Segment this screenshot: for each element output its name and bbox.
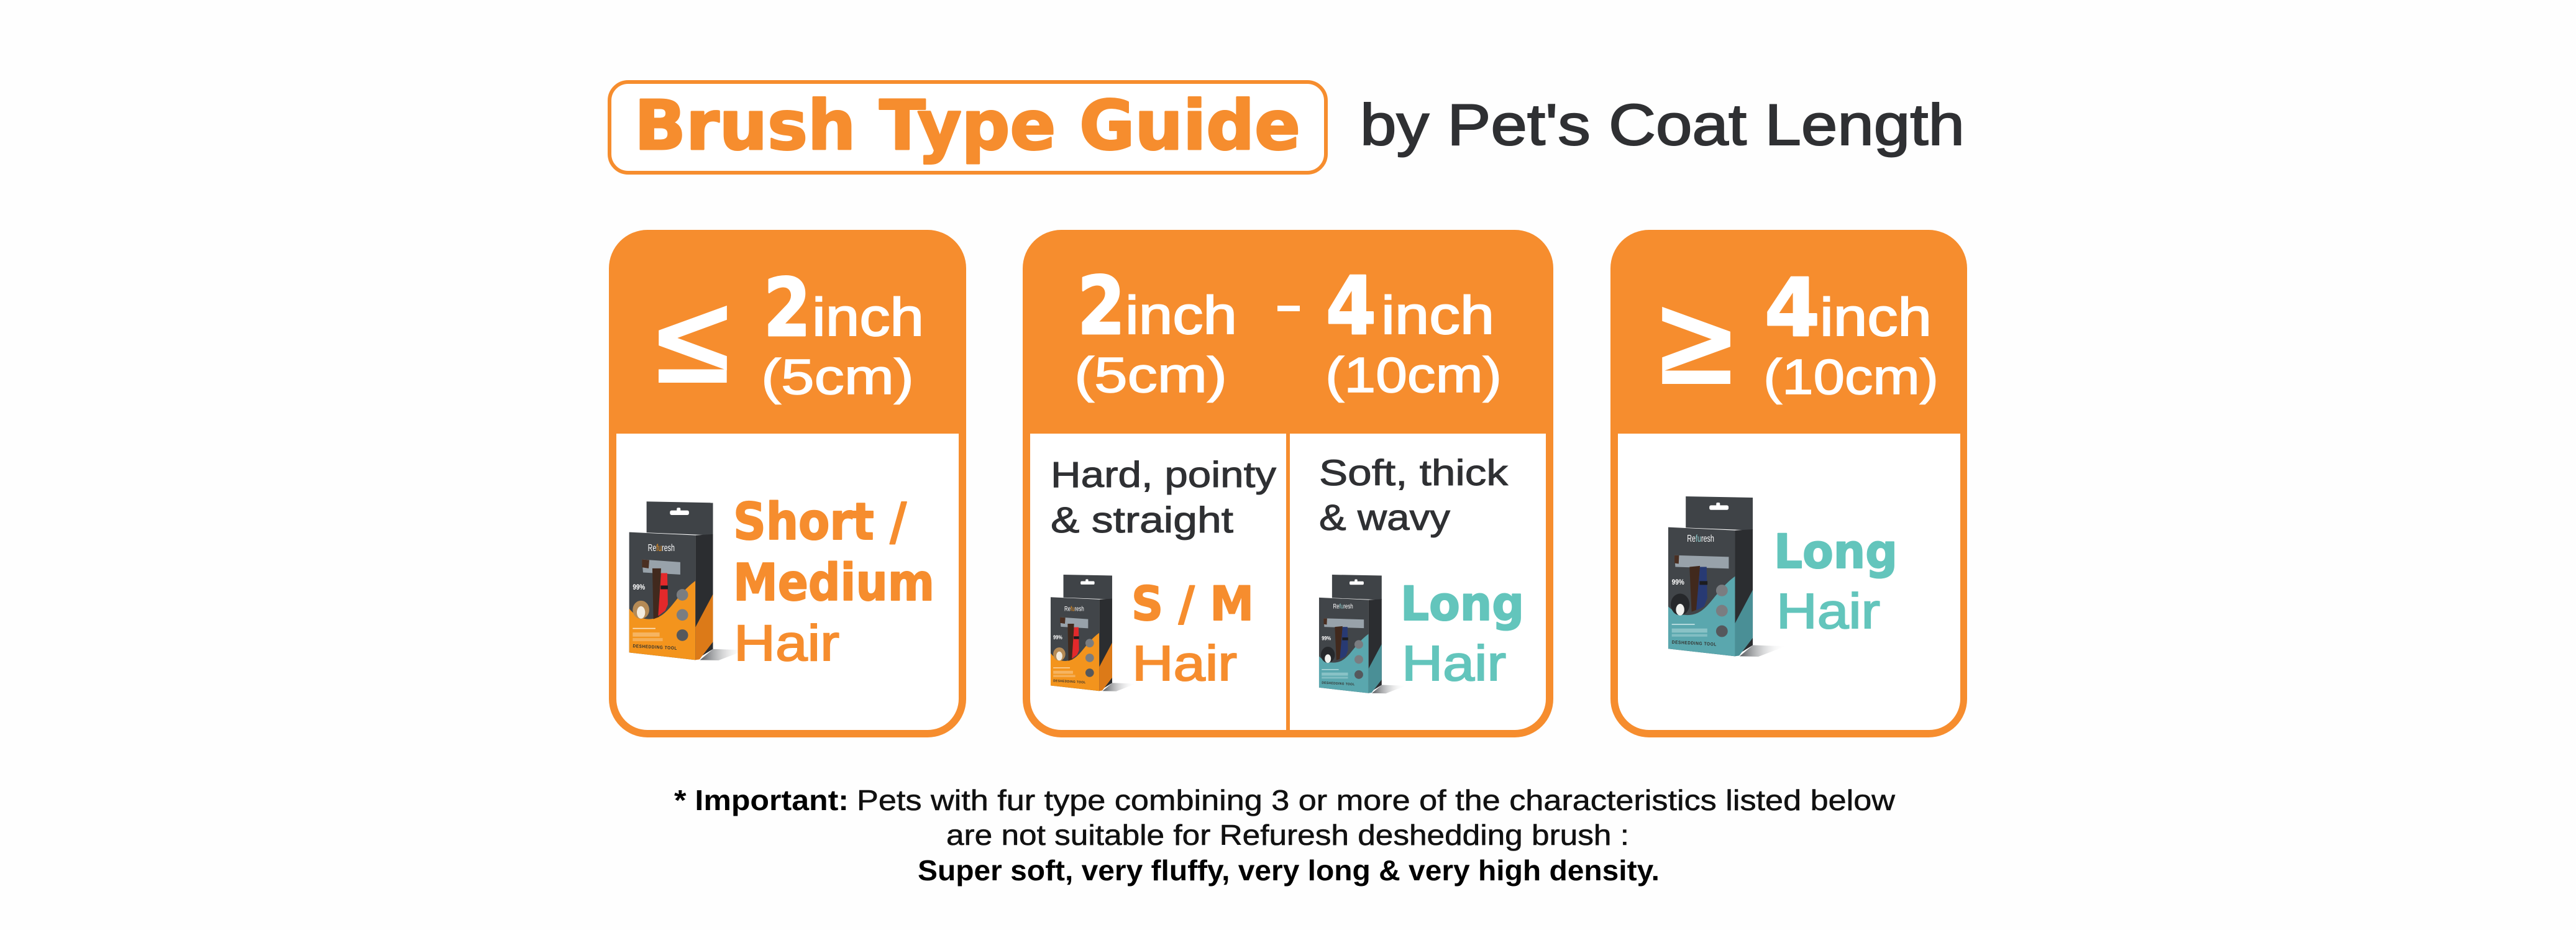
header: 2 inch to 4 inch: 2 [1077,260,1125,353]
header: greater than or equal 4 inch [1661,262,1939,407]
description: hard pointy straight [1051,455,1276,540]
label: short medium hair [733,493,934,672]
product box: teal long hair: DESHEDDING TOOL [1672,639,1717,647]
header: greater than or equal 4 inch: inch [1820,288,1932,347]
header: greater than or equal 4 inch: (10cm) [1763,349,1939,404]
product box: orange s/m hair: DESHEDDING TOOL [1053,679,1086,685]
panel: 2 to 4 inch [1023,230,1553,737]
product box: teal long hair small: 99% [1322,635,1331,641]
product box: orange s/m hair [1051,575,1136,691]
description: soft thick wavy: Soft, thick [1319,453,1509,493]
product box: orange s/m hair: Refuresh [1064,606,1084,613]
header: 2 inch to 4 inch: (10cm) [1325,347,1502,403]
header: greater than or equal 4 inch: ≥ [1661,275,1732,407]
label: short medium hair: Hair [734,615,839,672]
footnote: Pets with fur type combining 3 or more of the characteristics listed below [857,784,1896,816]
label: long hair: Hair [1776,583,1880,639]
product box: teal long hair small: Refuresh [1333,603,1353,610]
product box: teal long hair: 99% [1672,578,1684,586]
product box: orange short medium hair [629,501,746,660]
description: hard pointy straight: & straight [1051,500,1233,540]
header: less than or equal 2 inch: inch [812,288,924,347]
footnote: are not suitable for Refuresh deshedding brush : [946,819,1629,851]
product box: orange short medium hair: Refuresh [648,543,675,554]
product box: teal long hair small [1319,575,1406,693]
header: less than or equal 2 inch: 2 [764,262,811,355]
product box: teal long hair [1668,496,1786,657]
label: long hair small [1400,576,1524,691]
label: short medium hair: Short / [733,493,907,552]
label: long hair: Long [1774,524,1898,579]
panel: 4 inch and over [1610,230,1967,737]
label: s/m hair [1131,576,1254,691]
panel: up to 2 inch [609,230,966,737]
product box: orange short medium hair: 99% [633,583,646,591]
description: soft thick wavy [1319,453,1509,538]
header: greater than or equal 4 inch: 4 [1765,262,1820,355]
label: long hair small: Hair [1402,636,1506,691]
subtitle: by Pet's Coat Length [1360,92,1965,157]
header: 2 inch to 4 inch: (5cm) [1074,347,1227,403]
product box: teal long hair small: DESHEDDING TOOL [1322,682,1355,686]
header: 2 inch to 4 inch [1074,260,1502,403]
title badge: Brush Type Guide [634,86,1300,165]
product box: orange s/m hair: 99% [1053,634,1062,641]
header: 2 inch to 4 inch: 4 [1326,260,1376,353]
label: s/m hair: Hair [1132,636,1237,691]
header: 2 inch to 4 inch: inch [1381,286,1494,345]
header: less than or equal 2 inch: ≤ [657,274,728,406]
label: short medium hair: Medium [733,554,934,613]
footnote: Super soft, very fluffy, very long & very high density. [918,854,1660,887]
description: hard pointy straight: Hard, pointy [1051,455,1276,495]
description: soft thick wavy: & wavy [1319,498,1450,538]
header: less than or equal 2 inch: (5cm) [761,349,914,404]
footnote: * Important: [674,784,849,816]
product box: orange short medium hair: DESHEDDING TOOL [633,643,677,651]
title [610,82,1965,173]
product box: teal long hair: Refuresh [1687,534,1714,544]
header: 2 inch to 4 inch: inch [1125,286,1237,345]
label: long hair [1774,524,1898,639]
label: s/m hair: S / M [1131,576,1254,631]
header: less than or equal 2 inch [657,262,924,406]
label: long hair small: Long [1400,576,1524,631]
footnote [674,784,1896,887]
